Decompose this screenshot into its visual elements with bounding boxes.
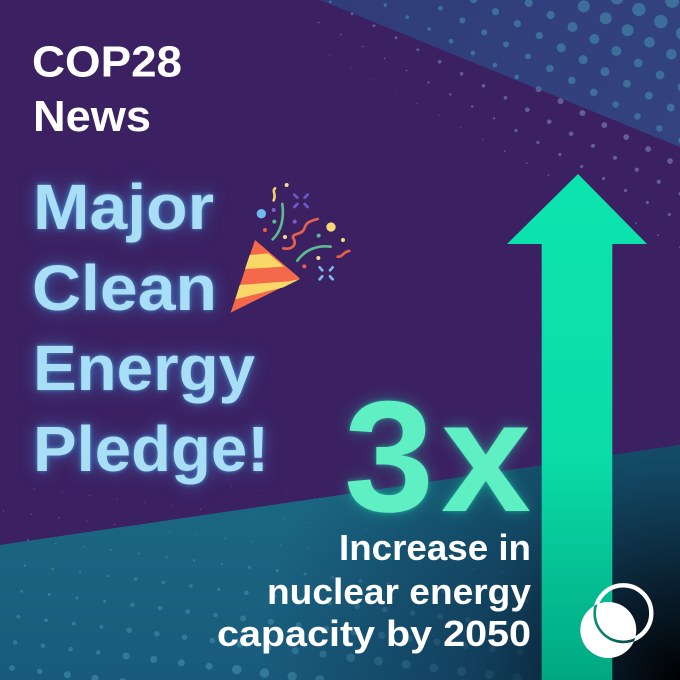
- title: Major Clean Energy Pledge!: [32, 171, 269, 485]
- text block: increase in nuclear energy capacity by 2050: [217, 527, 531, 654]
- icon: party popper with confetti: [231, 183, 349, 313]
- popper cone: [231, 240, 300, 313]
- big number: 3x: x: [441, 369, 531, 545]
- text line: capacity by 2050: capacity by 2050: [217, 613, 531, 654]
- title line: Energy: Energy: [33, 332, 255, 404]
- title line: Pledge!: Pledge!: [33, 413, 269, 485]
- title line: Major: Major: [33, 171, 214, 243]
- panel: top right blue wedge with dots: [319, 0, 680, 248]
- confetti streamers: [273, 188, 349, 261]
- panel: bottom teal band with dots: [0, 445, 680, 680]
- confetti dots: [257, 183, 345, 268]
- big number: 3x: 3: [344, 369, 434, 545]
- heading line: News: News: [33, 92, 151, 141]
- icon: circular logo: [580, 585, 652, 658]
- arrow: green upward arrow: [507, 174, 647, 680]
- title line: Clean: Clean: [32, 252, 217, 324]
- heading: COP28 News: [32, 38, 182, 141]
- confetti sparkles: [294, 195, 333, 279]
- text line: nuclear energy: nuclear energy: [267, 571, 531, 612]
- big number: 3x: [344, 369, 531, 545]
- text line: Increase in: Increase in: [339, 527, 531, 568]
- heading line: COP28: COP28: [32, 38, 182, 86]
